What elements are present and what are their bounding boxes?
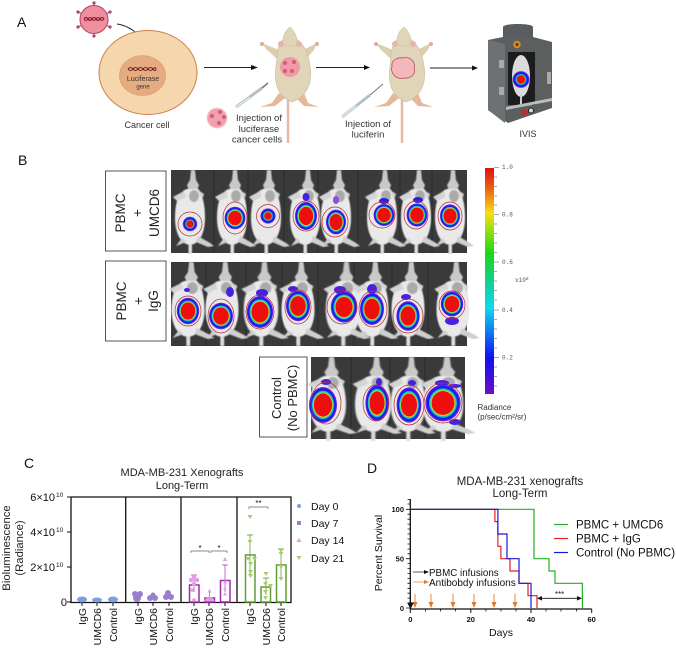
tick labels: 0	[408, 615, 412, 624]
panel label: B: B	[18, 152, 27, 168]
colour bar: radiance scale: x10	[515, 277, 526, 284]
legend: days: Day 0	[311, 501, 339, 513]
panel label: D: D	[367, 460, 377, 476]
group box: PBMC + UMCD6: +	[130, 209, 145, 217]
bar chart: bioluminescence: 10	[56, 492, 64, 499]
icon: mouse with tumour cells	[260, 27, 319, 143]
bar chart: bioluminescence: *	[198, 544, 202, 553]
axis titles: D: Percent Survival	[373, 515, 385, 591]
chart title: C: Long-Term	[156, 480, 208, 492]
tick labels: 60	[588, 615, 596, 624]
colour bar: radiance scale: 0.2	[502, 354, 513, 362]
imaging row: control mice	[308, 357, 475, 441]
legend: survival groups: PBMC + UMCD6	[576, 520, 663, 532]
icon: cancer cell cluster	[207, 108, 227, 128]
panel A: virus	[76, 1, 112, 38]
significance brackets	[191, 507, 268, 553]
tick labels: 0	[400, 604, 404, 613]
series: day 14 bars	[190, 580, 230, 602]
tick labels: 40	[527, 615, 535, 624]
arrow key: antibody infusions: Antibobdy infusions	[429, 578, 516, 589]
icon: mouse with large tumour	[374, 27, 433, 143]
legend: survival groups: Control (No PBMC)	[576, 548, 675, 560]
x tick labels: Control	[108, 608, 120, 642]
group box: PBMC + IgG: +	[131, 297, 146, 305]
label: injection of luciferase cancer cells: Injection of	[236, 113, 282, 124]
label: injection of luciferase cancer cells: luciferase	[239, 124, 279, 135]
icon: syringe 1	[236, 83, 268, 107]
group box: PBMC + IgG	[106, 261, 166, 341]
label: injection of luciferin: luciferin	[352, 130, 384, 140]
PBMC arrow at day 0	[408, 595, 413, 608]
colour bar: radiance scale: 0.8	[502, 212, 513, 218]
tick labels: 20	[467, 615, 475, 624]
tick labels: 50	[396, 554, 404, 564]
x tick labels: Control	[220, 608, 232, 642]
group box: PBMC + UMCD6: PBMC	[113, 193, 128, 233]
panel A: cancer cell: gene	[136, 84, 150, 90]
colour bar: radiance scale: 0.4	[502, 307, 513, 314]
x tick labels: IgG	[77, 608, 89, 625]
bar chart: bioluminescence: 6×10	[30, 492, 55, 504]
significance: survival gap	[537, 590, 582, 601]
group box: PBMC + UMCD6	[106, 171, 166, 251]
curve: Control	[410, 509, 531, 608]
legend: days: Day 21	[311, 553, 344, 565]
colour bar caption: (p/sec/cm²/sr)	[478, 412, 527, 422]
label: cancer cell: Cancer cell	[124, 120, 170, 130]
arrow: mouse to mouse	[316, 65, 370, 70]
bar chart: bioluminescence: **	[255, 499, 262, 508]
group box: PBMC + IgG: IgG	[146, 290, 161, 312]
arrow: mouse to IVIS	[430, 66, 478, 70]
arrow key: PBMC infusions: PBMC infusions	[429, 568, 499, 579]
survival chart	[391, 499, 596, 624]
legend: survival groups: PBMC + IgG	[576, 534, 641, 546]
icon: IVIS imaging machine	[488, 24, 552, 123]
bar chart: bioluminescence: 4×10	[30, 527, 55, 539]
y axis title: C: Bioluminescence	[1, 505, 13, 591]
label: IVIS: IVIS	[519, 129, 537, 139]
group box: Control (No PBMC)	[260, 357, 307, 437]
x tick labels	[77, 608, 288, 645]
bar chart: bioluminescence: 10	[56, 562, 64, 569]
bar chart: bioluminescence	[30, 492, 291, 645]
series: day 7	[132, 590, 174, 602]
imaging row: PBMC + IgG mice	[169, 262, 479, 346]
x tick labels: UMCD6	[92, 608, 104, 645]
series: day 0	[77, 596, 118, 602]
label: injection of luciferin: Injection of	[345, 119, 391, 130]
icon: syringe 2	[342, 84, 383, 117]
y axis title: C	[1, 505, 26, 591]
tick labels	[391, 505, 596, 624]
label: injection of luciferase cancer cells: cancer cells	[232, 134, 282, 146]
x tick labels: UMCD6	[204, 608, 216, 645]
bar chart: bioluminescence: 10	[56, 527, 64, 534]
colour bar: radiance scale: 0.6	[502, 259, 513, 266]
panel label: C: C	[24, 455, 34, 471]
x tick labels: UMCD6	[148, 608, 160, 645]
x tick labels: UMCD6	[261, 608, 273, 645]
colour bar caption: Radiance	[478, 403, 512, 412]
y axis title: C: (Radiance)	[14, 520, 26, 576]
axis titles: D	[373, 515, 513, 639]
group box: PBMC + UMCD6: UMCD6	[147, 189, 162, 237]
chart title: D: MDA-MB-231 xenografts	[457, 476, 584, 488]
series: day 21 points	[246, 515, 284, 600]
group box: Control (No PBMC): Control	[269, 377, 284, 419]
x tick labels: IgG	[245, 608, 257, 625]
bar chart: bioluminescence: 0	[61, 597, 67, 609]
legend: days	[296, 501, 344, 565]
chart title: D: Long-Term	[493, 488, 547, 500]
arrow: virus to cell	[117, 24, 146, 47]
x tick labels: IgG	[189, 608, 201, 625]
legend: days: Day 7	[311, 518, 339, 530]
infusion arrows	[412, 594, 518, 608]
significance: survival gap: ***	[555, 590, 564, 599]
x tick labels: Control	[276, 608, 288, 642]
colour bar: radiance scale: 1.0	[502, 164, 513, 171]
x tick labels: Control	[164, 608, 176, 642]
series: day 21 bars	[246, 555, 286, 602]
group box: PBMC + IgG: PBMC	[114, 281, 129, 321]
chart title: C: MDA-MB-231 Xenografts	[121, 467, 244, 479]
bar chart: bioluminescence: 2×10	[30, 562, 55, 574]
curve: PBMC + IgG	[410, 509, 537, 608]
axis titles: D: Days	[489, 627, 513, 639]
imaging row: PBMC + UMCD6 mice	[171, 170, 474, 254]
panel label: A: A	[17, 14, 27, 30]
bar chart: bioluminescence: *	[217, 544, 221, 553]
panel A: cancer cell	[99, 30, 197, 114]
tick labels: 100	[391, 505, 404, 514]
panel A: cancer cell: Luciferase	[127, 76, 159, 83]
legend: days: Day 14	[311, 535, 344, 547]
colour bar: radiance scale	[485, 164, 529, 394]
curve: PBMC + UMCD6	[410, 509, 582, 608]
group box: Control (No PBMC): (No PBMC)	[285, 365, 300, 431]
x tick labels: IgG	[133, 608, 145, 625]
series: day 14 points	[189, 557, 227, 602]
arrow: cell to mouse	[204, 65, 258, 70]
legend: survival groups	[554, 520, 675, 560]
colour bar: radiance scale: 8	[526, 276, 529, 282]
